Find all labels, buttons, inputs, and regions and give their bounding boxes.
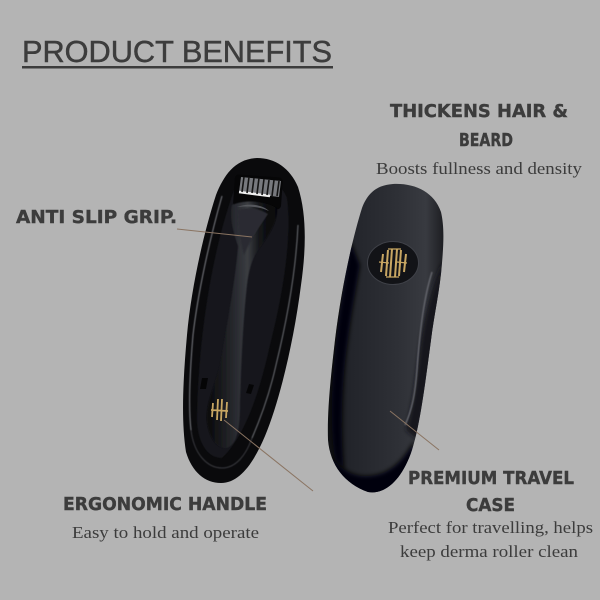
logo on handle: [211, 399, 228, 421]
product: open case with derma roller: [183, 158, 305, 483]
pointer lines: [177, 229, 439, 491]
case inner tray: [197, 177, 288, 458]
text: ergonomic handle: Easy to hold and operate: [72, 523, 259, 542]
roller handle: [207, 202, 277, 448]
ridge highlight: [405, 272, 432, 425]
text: thickens hair and beard: BEARD: [459, 130, 513, 151]
case left shadow: [332, 240, 360, 470]
roller neck: [237, 205, 269, 211]
text: premium travel case: [388, 468, 593, 561]
text: thickens hair and beard: Boosts fullness and density: [376, 159, 583, 178]
text: ergonomic handle: ERGONOMIC HANDLE: [63, 494, 267, 515]
open case shell: [183, 158, 305, 483]
text: premium travel case: keep derma roller clean: [400, 542, 579, 561]
case right facet: [406, 262, 443, 440]
grip highlight: [238, 208, 268, 255]
text: thickens hair and beard: THICKENS HAIR &: [390, 101, 568, 122]
closed case body: [328, 184, 443, 492]
title: PRODUCT BENEFITS: [22, 34, 332, 69]
text: premium travel case: CASE: [466, 495, 515, 516]
case bottom shadow: [332, 442, 414, 492]
text: ergonomic handle: [63, 494, 267, 542]
product: closed travel case: [328, 184, 443, 500]
emblem: gold monogram badge: [368, 242, 418, 284]
case clips: [200, 378, 254, 394]
text: thickens hair and beard: [376, 101, 583, 178]
roller head: [233, 174, 283, 210]
case rim highlights: [190, 196, 298, 468]
text: premium travel case: Perfect for travelling, helps: [388, 518, 593, 537]
text: premium travel case: PREMIUM TRAVEL: [408, 468, 574, 489]
text: anti slip grip: ANTI SLIP GRIP.: [16, 207, 177, 228]
